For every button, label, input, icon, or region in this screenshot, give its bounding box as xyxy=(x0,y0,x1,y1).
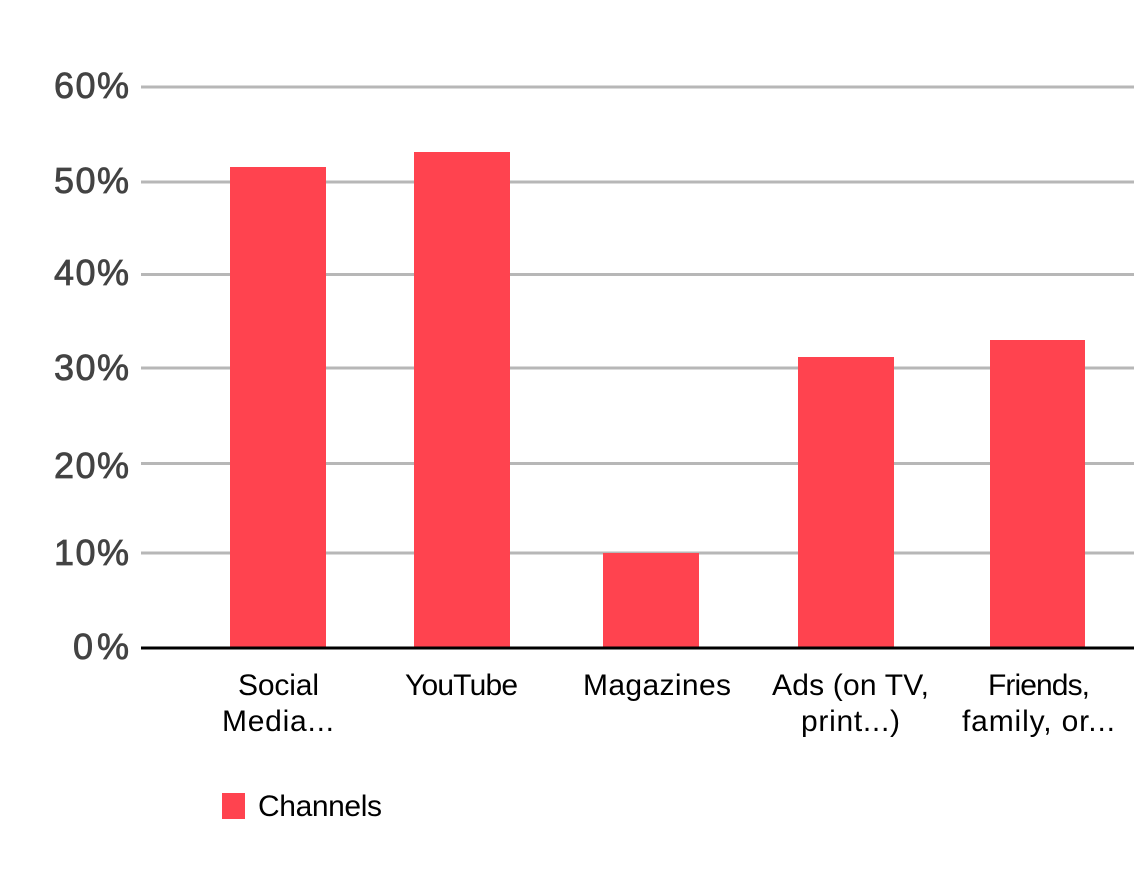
y axis labels: 10% xyxy=(54,532,129,573)
y axis labels xyxy=(54,65,129,667)
x axis baseline xyxy=(141,646,1134,650)
y axis labels: 0% xyxy=(73,626,129,667)
x axis labels: Social xyxy=(238,669,319,702)
x axis labels: Friends, xyxy=(988,669,1090,702)
bars xyxy=(230,152,1085,648)
x axis labels: print...) xyxy=(801,705,900,738)
x axis labels: Ads (on TV, xyxy=(772,669,929,702)
x axis labels: Media... xyxy=(222,705,334,738)
legend: Channels xyxy=(258,790,382,823)
x axis labels: family, or... xyxy=(962,705,1115,738)
x axis labels: YouTube xyxy=(405,669,518,702)
x axis labels xyxy=(222,669,1115,738)
y axis labels: 30% xyxy=(54,347,129,388)
y axis labels: 40% xyxy=(54,252,129,293)
y axis labels: 50% xyxy=(54,160,129,201)
x axis labels: Magazines xyxy=(583,669,731,702)
y axis labels: 20% xyxy=(54,445,129,486)
y axis labels: 60% xyxy=(54,65,129,106)
